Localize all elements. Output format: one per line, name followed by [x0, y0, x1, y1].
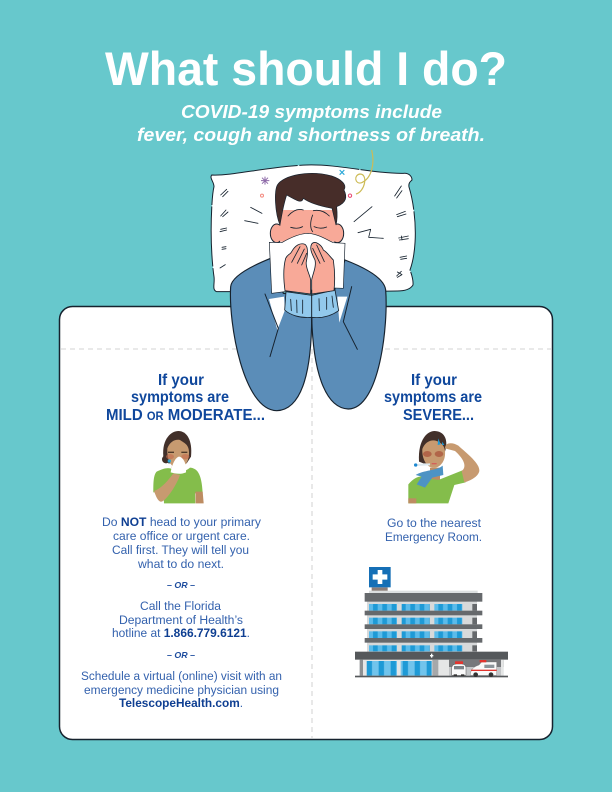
text: mild instructions: Department of Health’s [119, 613, 243, 627]
heading: mild or moderate [106, 372, 265, 424]
text: mild instructions [81, 515, 282, 710]
icon: woman with tissue [153, 431, 204, 503]
text: severe instructions: Emergency Room. [385, 530, 482, 544]
subtitle: COVID-19 symptoms include [181, 101, 442, 122]
text: mild instructions: Call the Florida [140, 599, 221, 613]
panel: card [60, 306, 552, 740]
text: mild instructions: – OR – [167, 580, 195, 590]
text: mild instructions: hotline at 1.866.779.6121. [112, 626, 250, 640]
ears [270, 224, 283, 243]
heading: severe: SEVERE... [403, 407, 474, 424]
left arm [230, 258, 312, 411]
illustration: hospital [355, 567, 508, 677]
subtitle: fever, cough and shortness of breath. [137, 124, 485, 145]
hands [284, 244, 311, 294]
chest gap [269, 297, 347, 330]
subtitle [137, 101, 485, 145]
tissue [269, 233, 345, 293]
right arm [312, 260, 386, 409]
text: severe instructions [385, 516, 482, 544]
illustration: man blowing nose [230, 173, 386, 411]
text: mild instructions: emergency medicine physician using [84, 683, 279, 697]
icon: police car [452, 661, 466, 676]
face [279, 210, 336, 242]
heading: mild or moderate: symptoms are [131, 389, 229, 406]
text: mild instructions: Schedule a virtual (online) visit with an [81, 669, 282, 683]
heading: severe: If your [411, 372, 457, 389]
text: mild instructions: what to do next. [137, 557, 224, 571]
face features [288, 209, 329, 232]
icon: woman with fever [408, 431, 479, 503]
text: severe instructions: Go to the nearest [387, 516, 482, 530]
text: mild instructions: TelescopeHealth.com. [119, 696, 243, 710]
icon: ambulance [470, 660, 497, 677]
heading: mild or moderate: MILD OR MODERATE... [106, 407, 265, 424]
text: mild instructions: – OR – [167, 650, 195, 660]
title: What should I do? [105, 42, 507, 95]
pillow [211, 150, 415, 292]
heading: severe: symptoms are [384, 389, 482, 406]
text: mild instructions: Do NOT head to your primary [102, 515, 262, 529]
text: mild instructions: Call first. They will tell you [112, 543, 249, 557]
hospital sign [369, 567, 391, 591]
hair [275, 173, 346, 225]
heading: severe [384, 372, 482, 424]
heading: mild or moderate: If your [158, 372, 204, 389]
text: mild instructions: care office or urgent care. [113, 529, 250, 543]
sleeve cuffs [285, 290, 339, 318]
